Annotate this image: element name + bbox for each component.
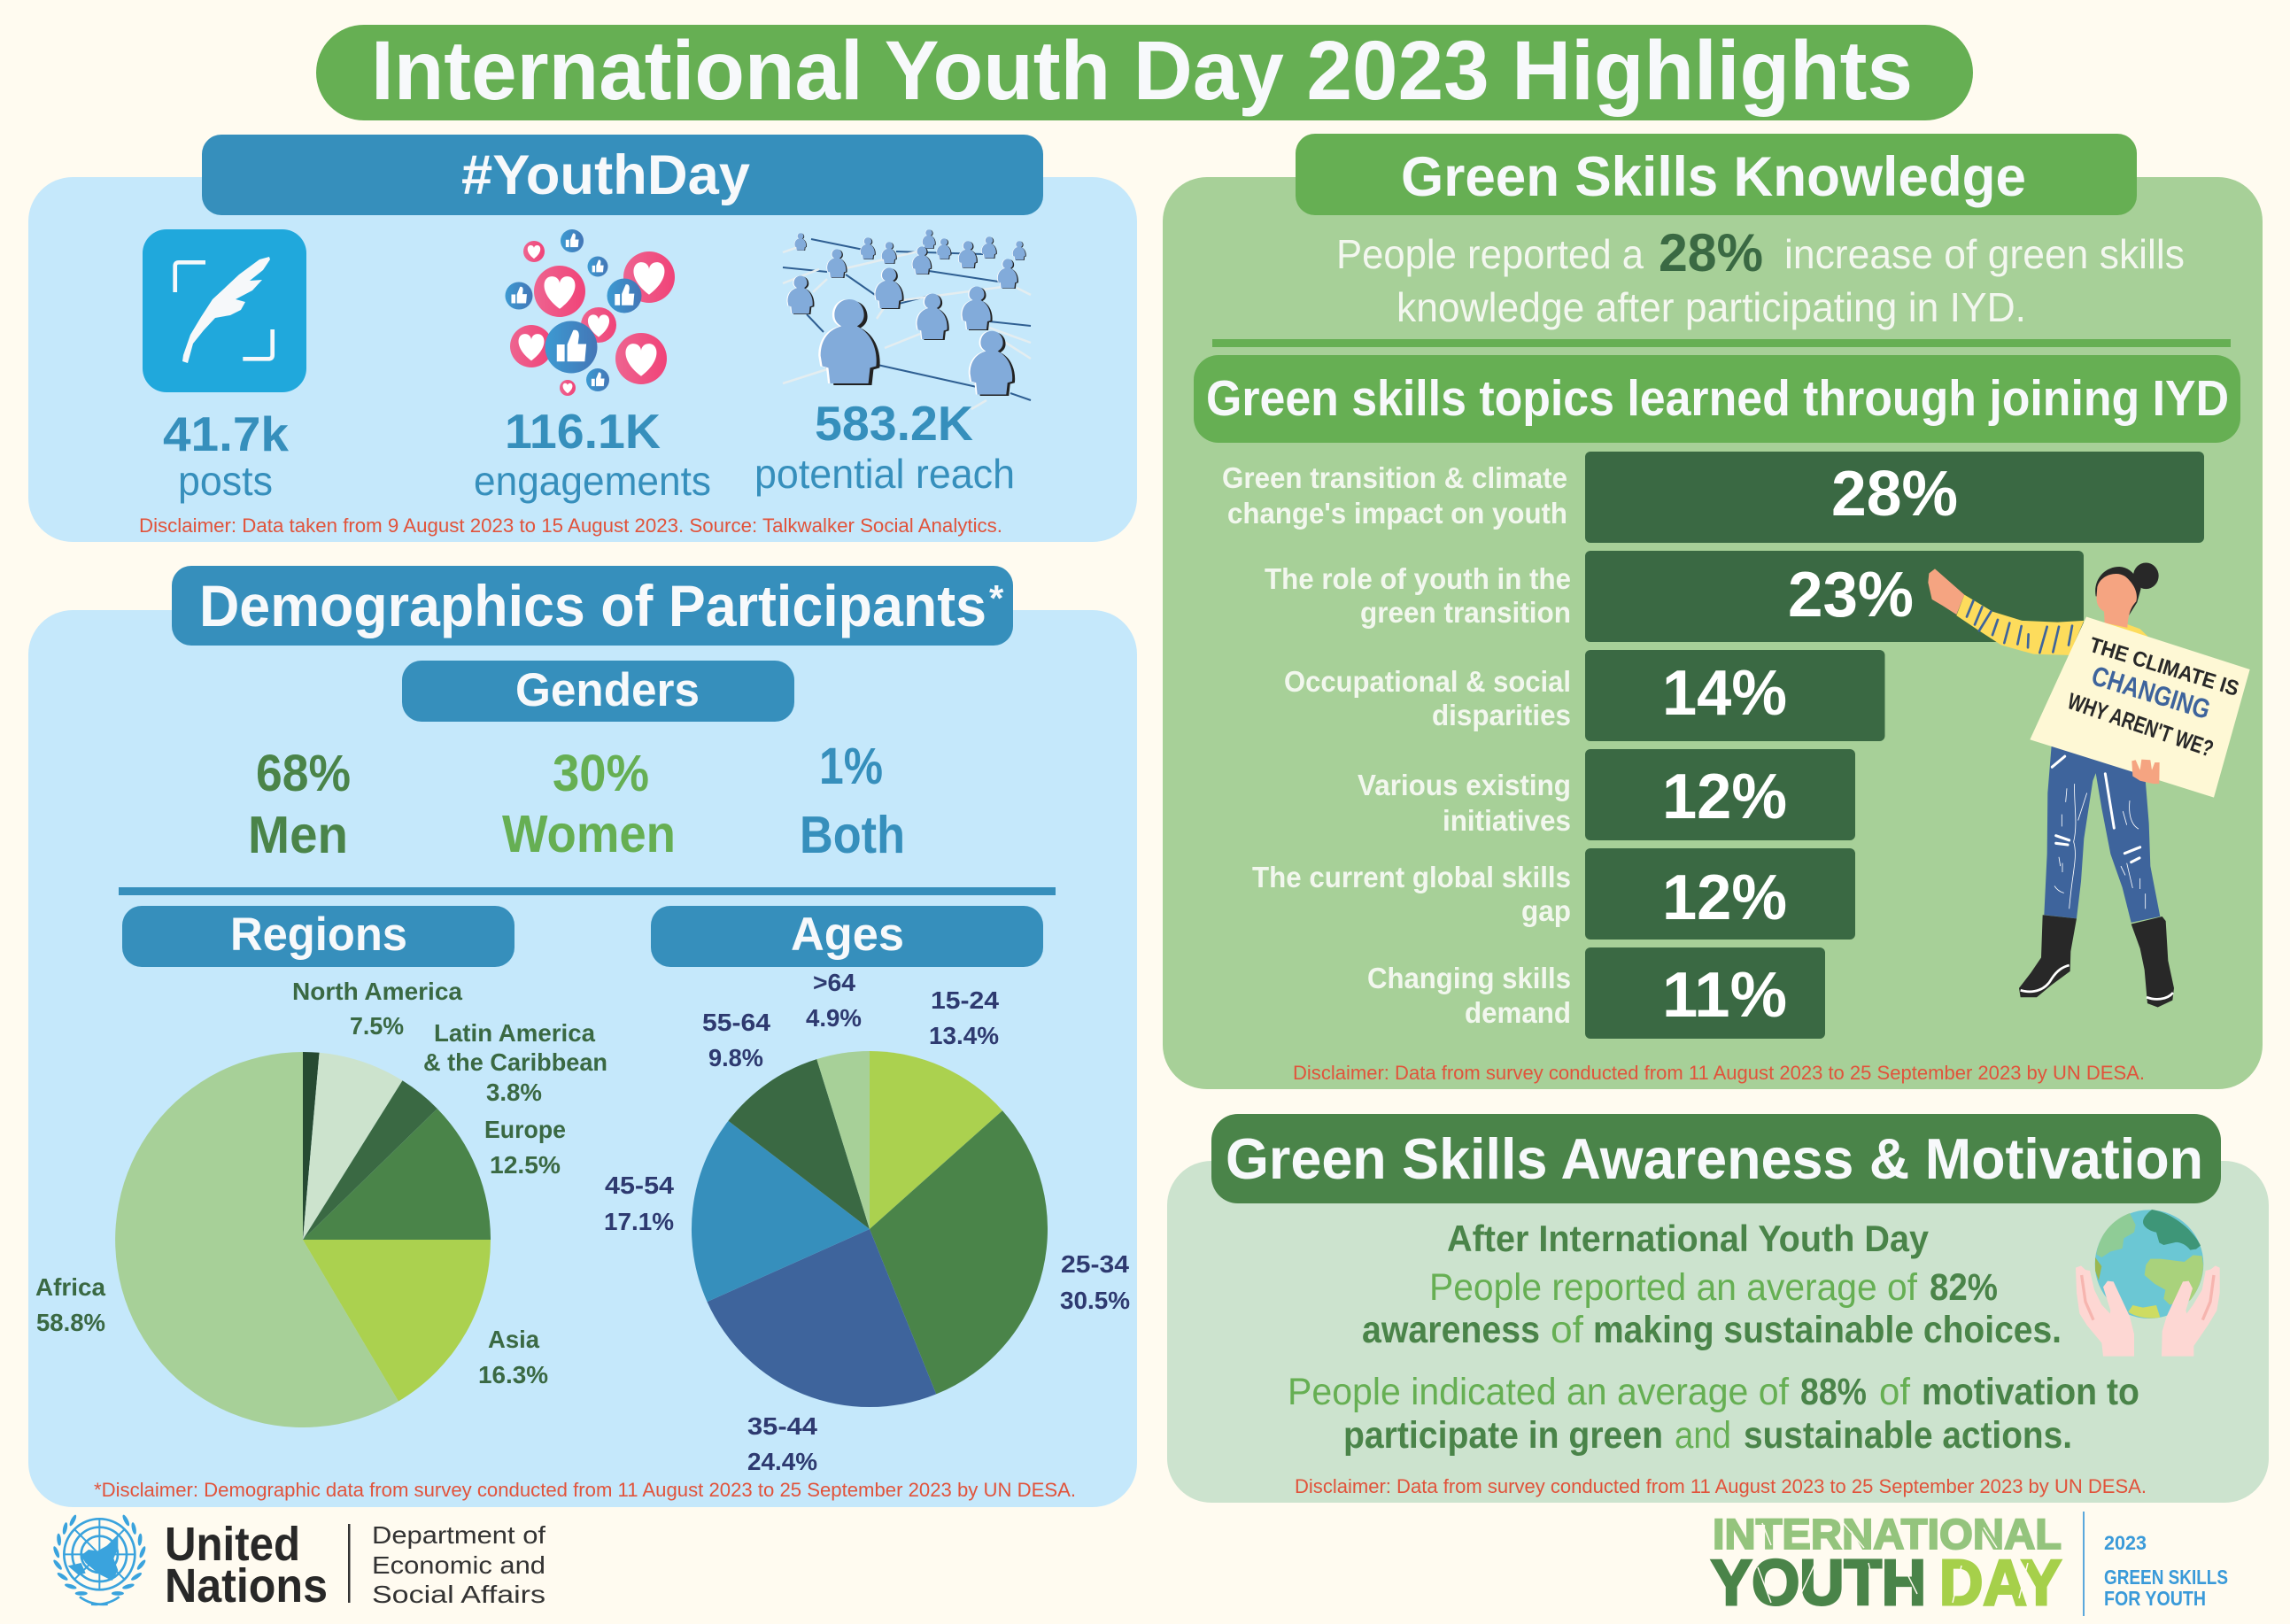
stat: men: 68% xyxy=(256,745,351,802)
heading: ages: Ages xyxy=(791,909,904,961)
sign text: THE CLIMATE IS xyxy=(2086,633,2241,701)
bar chart: topics xyxy=(1222,452,2204,1039)
bar: green transition: Green transition & climate xyxy=(1222,461,1567,494)
bar: green transition: 28% xyxy=(1831,459,1958,530)
text: awareness statement: of xyxy=(1551,1309,1584,1351)
text: motivation statement: sustainable actions. xyxy=(1744,1414,2072,1457)
logo: International Youth Day: GREEN SKILLS xyxy=(2104,1566,2228,1589)
logo: International Youth Day xyxy=(1711,1512,2228,1619)
labels: ages: 30.5% xyxy=(1060,1287,1130,1314)
labels: ages: 45-54 xyxy=(605,1172,674,1199)
bar: existing initiatives: initiatives xyxy=(1443,804,1571,837)
text: motivation statement: 88% xyxy=(1800,1371,1867,1413)
logo: International Youth Day: YOUTH xyxy=(1711,1548,1926,1619)
title banner: International Youth Day 2023 Highlights xyxy=(371,24,1913,118)
bar: changing demand: demand xyxy=(1465,996,1571,1029)
icon: quill posts xyxy=(143,229,306,392)
stat: both xyxy=(800,738,905,864)
illustration: activist with sign xyxy=(1928,562,2250,1008)
text: motivation statement: participate in green xyxy=(1343,1414,1663,1457)
sign text: CHANGING xyxy=(2088,660,2214,725)
stat: posts: 41.7k xyxy=(163,406,289,461)
bar: role of youth xyxy=(1265,551,2084,642)
labels: regions: 3.8% xyxy=(486,1079,542,1106)
stat: women: Women xyxy=(502,805,676,863)
text: motivation statement: motivation to xyxy=(1922,1371,2139,1413)
pie chart: ages xyxy=(692,1051,1048,1407)
labels: regions: Africa xyxy=(35,1273,105,1301)
disclaimer: Disclaimer: Data taken from 9 August 2023 to 15 August 2023. Source: Talkwalker Social Analytics. xyxy=(139,514,1002,537)
stat: men: Men xyxy=(248,806,348,864)
heading: demographics: Demographics of Participants xyxy=(199,573,986,638)
bar: changing demand xyxy=(1367,947,1825,1039)
labels: ages: 9.8% xyxy=(708,1044,763,1071)
labels: regions: Europe xyxy=(484,1116,566,1143)
bar: global skills gap: 12% xyxy=(1662,862,1787,933)
labels: ages: 55-64 xyxy=(702,1009,770,1036)
labels: ages: >64 xyxy=(813,969,855,996)
stat: women: 30% xyxy=(553,745,649,802)
heading: regions: Regions xyxy=(230,909,407,961)
text: 28% increase statement: People reported a xyxy=(1336,231,1644,277)
logo: United Nations DESA: United xyxy=(165,1518,300,1571)
heading: demographics: * xyxy=(989,577,1004,619)
icon: people network xyxy=(783,229,1031,409)
logo: United Nations DESA: Social Affairs xyxy=(372,1581,545,1608)
bar: role of youth: 23% xyxy=(1788,560,1914,630)
stat: engagements xyxy=(474,404,711,504)
bar: changing demand: 11% xyxy=(1662,960,1787,1031)
text: 28% increase statement: 28% xyxy=(1659,223,1763,282)
stat: potential reach: potential reach xyxy=(754,451,1015,497)
labels: ages: 25-34 xyxy=(1061,1250,1129,1278)
logo: International Youth Day: INTERNATIONAL xyxy=(1713,1512,2062,1558)
labels: regions: & the Caribbean xyxy=(423,1048,607,1076)
bar: role of youth: green transition xyxy=(1360,596,1571,629)
bar: occupational disparities: Occupational & social xyxy=(1284,665,1571,698)
labels: ages: 13.4% xyxy=(929,1022,999,1049)
heading: topics learned xyxy=(1194,355,2240,443)
bar: occupational disparities xyxy=(1284,650,1884,741)
labels: ages: 15-24 xyxy=(931,986,999,1014)
icon: hearts and likes xyxy=(505,229,675,396)
heading: #YouthDay xyxy=(202,135,1043,215)
subheading: after IYD: After International Youth Day xyxy=(1447,1218,1930,1259)
logo: United Nations DESA xyxy=(51,1512,545,1612)
text: 28% increase statement: increase of green skills xyxy=(1784,231,2185,277)
disclaimer: Disclaimer: Data from survey conducted from 11 August 2023 to 25 September 2023 by UN DESA. xyxy=(1295,1475,2147,1497)
text: 28% increase statement: knowledge after participating in IYD. xyxy=(1396,284,2026,330)
bar: existing initiatives: Various existing xyxy=(1358,769,1571,801)
logo: United Nations DESA: Nations xyxy=(165,1559,328,1612)
stat: men xyxy=(248,745,351,864)
text: motivation statement: and xyxy=(1675,1414,1731,1457)
heading: regions xyxy=(122,906,514,967)
labels: regions: 7.5% xyxy=(350,1012,404,1040)
bar: changing demand: Changing skills xyxy=(1367,962,1571,994)
bar: green transition: change's impact on youth xyxy=(1227,497,1567,530)
labels: regions: 16.3% xyxy=(478,1361,548,1388)
labels: ages: 17.1% xyxy=(604,1208,674,1235)
text: awareness statement xyxy=(1362,1266,2062,1351)
text: motivation statement: People indicated an average of xyxy=(1288,1371,1790,1413)
text: motivation statement: of xyxy=(1879,1371,1911,1413)
pie chart: regions xyxy=(115,1052,491,1427)
heading: green skills knowledge xyxy=(1296,134,2137,215)
heading: genders: Genders xyxy=(515,664,700,716)
disclaimer: *Disclaimer: Demographic data from survey conducted from 11 August 2023 to 25 September 2023 by UN DESA. xyxy=(94,1479,1076,1501)
logo: United Nations DESA: Department of xyxy=(372,1521,545,1549)
heading: #YouthDay: #YouthDay xyxy=(461,144,750,206)
labels: regions: 58.8% xyxy=(36,1309,105,1336)
bar: existing initiatives: 12% xyxy=(1662,762,1787,832)
text: motivation statement xyxy=(1288,1371,2139,1457)
text: awareness statement: People reported an average of xyxy=(1429,1266,1918,1309)
stat: both: 1% xyxy=(819,738,883,795)
bar: occupational disparities: 14% xyxy=(1662,658,1787,729)
logo: United Nations DESA: Economic and xyxy=(372,1551,545,1579)
labels: regions xyxy=(35,978,607,1388)
labels: ages: 35-44 xyxy=(747,1412,817,1440)
stat: engagements: 116.1K xyxy=(505,404,661,459)
stat: women xyxy=(502,745,676,863)
bar: existing initiatives xyxy=(1358,749,1855,840)
panel: demographics of participants xyxy=(28,566,1137,1507)
stat: engagements: engagements xyxy=(474,458,711,504)
labels: regions: Asia xyxy=(488,1326,539,1353)
heading: green skills knowledge: Green Skills Knowledge xyxy=(1401,146,2026,208)
bar: global skills gap: The current global skills xyxy=(1252,861,1571,893)
sign text: WHY AREN'T WE? xyxy=(2064,687,2217,762)
icon: UN emblem xyxy=(51,1512,147,1605)
text: 28% increase statement xyxy=(1336,223,2185,330)
stat: both: Both xyxy=(800,806,905,864)
heading: genders xyxy=(402,661,794,722)
text: awareness statement: making sustainable choices. xyxy=(1593,1309,2062,1351)
panel: #YouthDay social stats xyxy=(28,135,1137,542)
heading: awareness and motivation: Green Skills Awareness & Motivation xyxy=(1226,1126,2203,1191)
stat: posts: posts xyxy=(178,458,273,504)
stat: potential reach: 583.2K xyxy=(815,396,973,451)
labels: regions: North America xyxy=(292,978,462,1005)
labels: regions: Latin America xyxy=(434,1019,595,1047)
panel: green skills awareness and motivation xyxy=(1167,1114,2269,1503)
labels: ages: 4.9% xyxy=(806,1004,862,1032)
labels: regions: 12.5% xyxy=(490,1151,561,1179)
icon: hands holding globe xyxy=(2076,1210,2220,1357)
labels: ages xyxy=(604,969,1130,1475)
bar: occupational disparities: disparities xyxy=(1432,699,1571,731)
bar: role of youth: The role of youth in the xyxy=(1265,562,1571,595)
text: awareness statement: awareness xyxy=(1362,1309,1540,1351)
sign text xyxy=(2064,633,2241,762)
disclaimer: Disclaimer: Data from survey conducted from 11 August 2023 to 25 September 2023 by UN DESA. xyxy=(1293,1062,2145,1084)
logo: International Youth Day: 2023 xyxy=(2104,1532,2147,1554)
heading: ages xyxy=(651,906,1043,967)
panel: green skills knowledge xyxy=(1163,134,2263,1089)
stat: potential reach xyxy=(754,396,1015,497)
text: awareness statement: 82% xyxy=(1930,1266,1998,1309)
stat: posts xyxy=(163,406,289,504)
bar: green transition xyxy=(1222,452,2204,543)
logo: International Youth Day: FOR YOUTH xyxy=(2104,1587,2206,1610)
logo: International Youth Day: DAY xyxy=(1939,1548,2062,1619)
labels: ages: 24.4% xyxy=(747,1448,817,1475)
bar: global skills gap: gap xyxy=(1521,894,1571,927)
bar: global skills gap xyxy=(1252,848,1855,940)
